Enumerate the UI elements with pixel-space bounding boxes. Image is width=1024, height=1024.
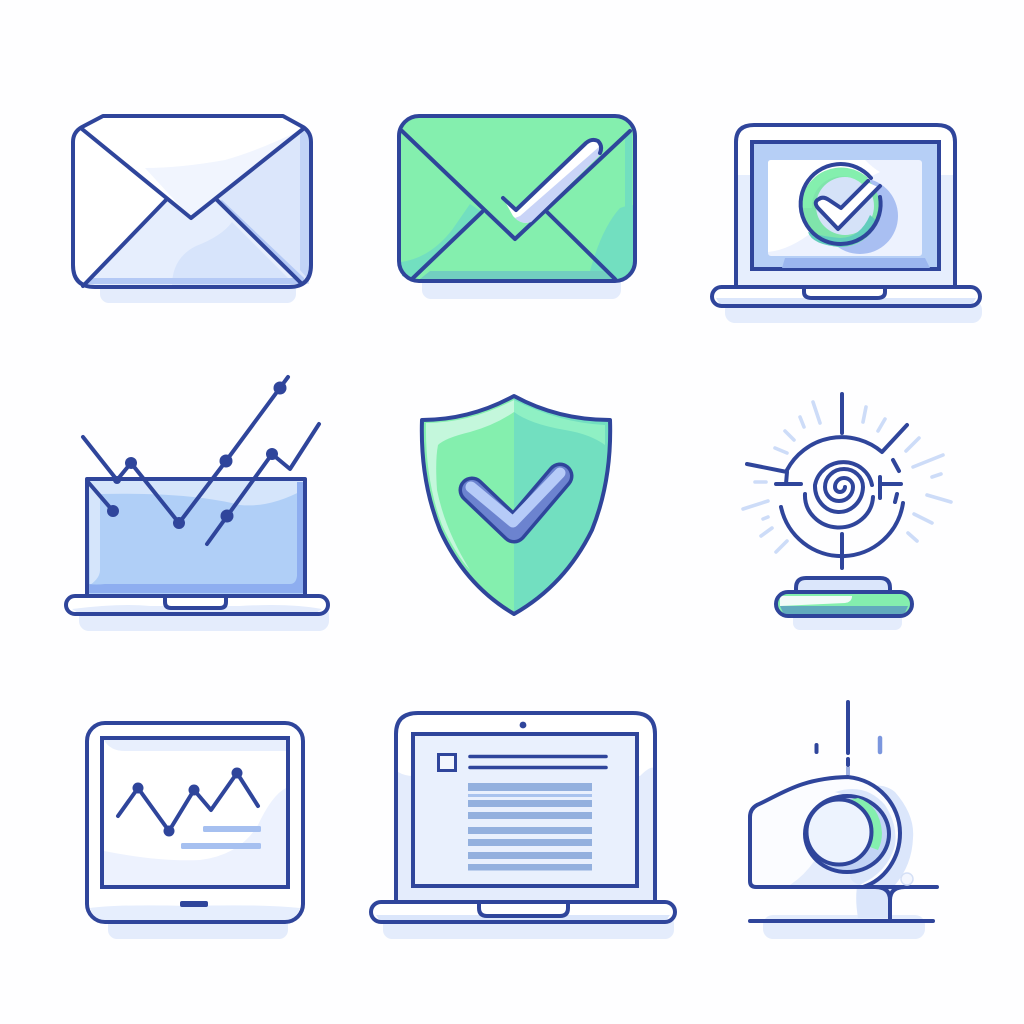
laptop notch — [804, 288, 885, 298]
chart laptop notch — [165, 597, 226, 608]
tablet chart line — [118, 773, 258, 831]
check mark — [503, 140, 601, 223]
envelope outline — [73, 116, 311, 287]
second trend line — [207, 424, 319, 544]
tablet screen — [102, 738, 288, 887]
green envelope flap — [402, 131, 630, 239]
short trend line — [88, 482, 113, 511]
badge circle — [802, 169, 880, 247]
laptop screen — [752, 142, 939, 269]
badge shadow — [822, 178, 898, 254]
projector shadow — [763, 915, 925, 939]
shield right half — [514, 396, 610, 614]
camera — [520, 722, 526, 728]
document screen — [413, 734, 637, 886]
shield highlight — [426, 400, 514, 570]
envelope tinted panels — [83, 200, 302, 286]
projector foot — [875, 887, 905, 920]
document laptop base — [371, 902, 675, 922]
stand top — [796, 578, 890, 592]
screen window — [768, 160, 922, 256]
green envelope outline — [399, 116, 635, 281]
projector lens — [806, 800, 872, 864]
stand base — [776, 592, 912, 616]
shield left half — [422, 396, 514, 614]
projector pale backdrop — [785, 785, 913, 918]
icon: tablet with line chart — [87, 723, 303, 939]
envelope body — [73, 116, 311, 287]
icon: plain envelope — [73, 116, 311, 303]
icon: laptop with rising line chart — [66, 377, 329, 631]
target left arm — [747, 464, 801, 484]
projector lens ring — [805, 796, 889, 872]
document laptop lid — [396, 713, 655, 902]
chart laptop base — [66, 596, 328, 614]
small knob — [901, 873, 913, 885]
data points — [107, 382, 286, 529]
shield outline — [422, 396, 610, 614]
target top arc — [787, 425, 907, 470]
document heading lines — [470, 756, 606, 768]
shield check — [472, 476, 560, 530]
inner arc — [805, 494, 873, 527]
signal lines — [846, 702, 850, 765]
spiral — [815, 462, 872, 512]
light rays — [743, 402, 951, 552]
document text bars — [468, 783, 592, 870]
document checkbox — [438, 754, 456, 770]
projector body — [750, 777, 900, 887]
icon: green envelope with check — [399, 116, 635, 299]
laptop lid — [736, 125, 955, 288]
projector desk line — [750, 919, 933, 923]
envelope flap — [82, 129, 303, 218]
icon: spiral target on stand — [743, 394, 951, 630]
tablet legend bars — [181, 826, 261, 849]
target bottom arc — [781, 503, 903, 556]
tablet home button — [180, 901, 208, 907]
tablet body — [87, 723, 303, 922]
document laptop shadow — [383, 915, 674, 939]
green envelope shading — [588, 205, 634, 279]
main trend line — [83, 377, 288, 523]
icon: projector — [750, 702, 937, 939]
icon: laptop with document — [371, 713, 675, 939]
tablet shadow — [108, 915, 288, 939]
green envelope folds — [412, 212, 615, 279]
stand shadow — [793, 610, 902, 630]
chart laptop screen shading — [89, 481, 303, 585]
green envelope shadow — [422, 265, 621, 299]
crosshair lines — [840, 394, 844, 568]
chart laptop outline — [87, 479, 305, 595]
tablet data points — [132, 768, 242, 836]
laptop base — [712, 287, 980, 306]
envelope folds — [83, 200, 302, 286]
document laptop notch — [479, 903, 568, 916]
green envelope body — [399, 116, 635, 281]
laptop shadow — [725, 300, 982, 323]
icon: laptop with check badge — [712, 125, 982, 323]
icon: shield with check — [422, 396, 610, 614]
chart laptop shadow — [79, 605, 329, 631]
chart laptop screen — [87, 479, 305, 595]
badge check — [816, 182, 880, 231]
envelope shadow — [100, 270, 296, 303]
target right arm — [880, 460, 901, 502]
